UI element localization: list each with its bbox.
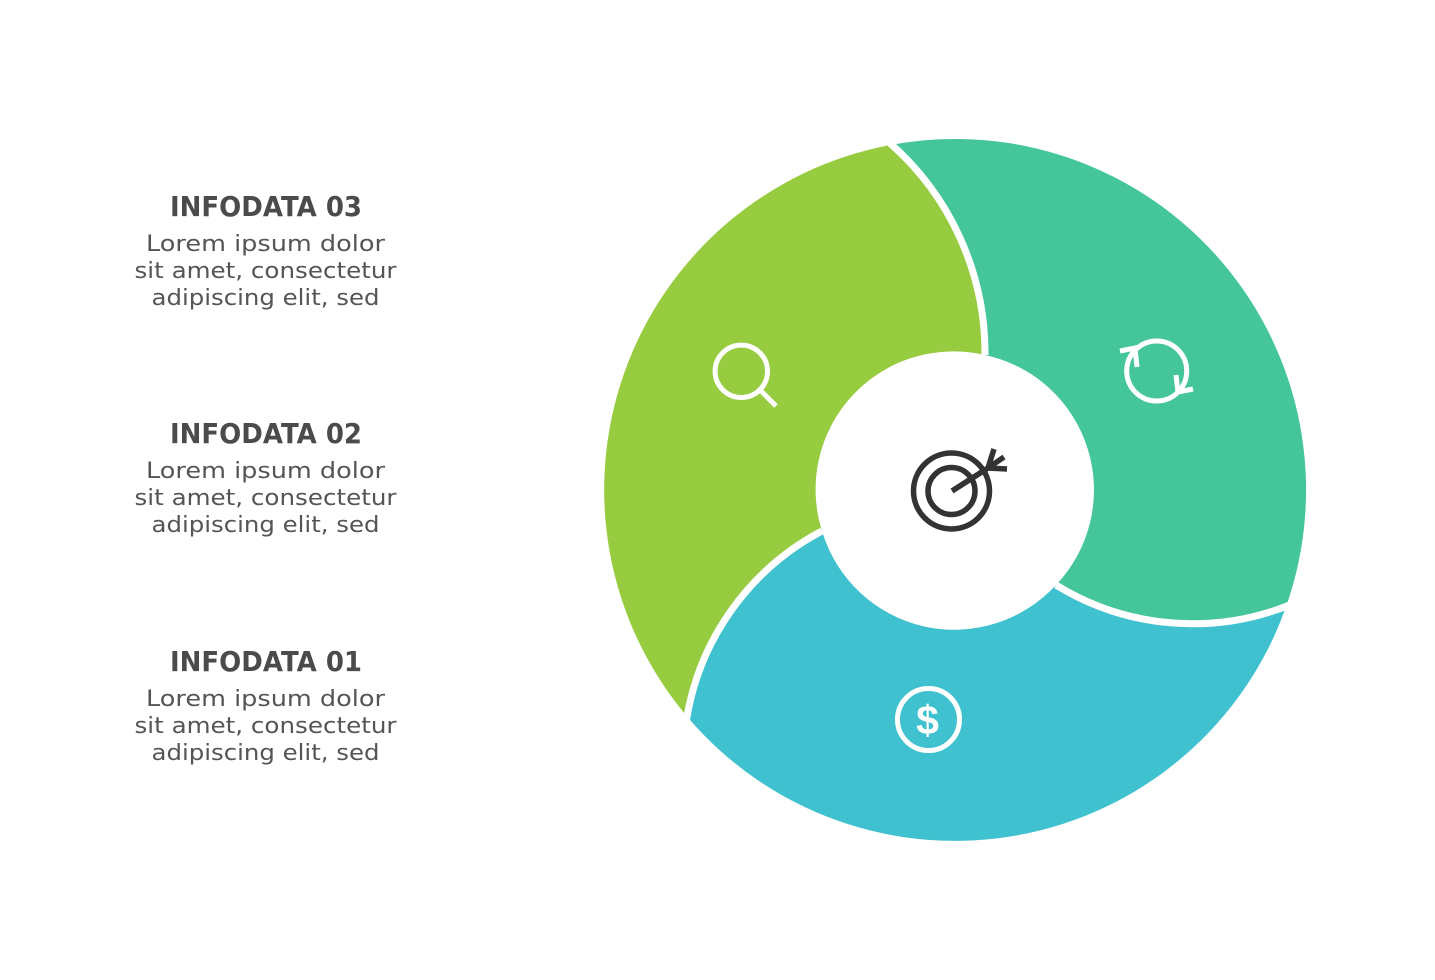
body text: infodata 03: sit amet, consectetur [134,258,397,284]
circular diagram [604,139,1306,841]
body text: infodata 02: adipiscing elit, sed [152,512,380,538]
body text: infodata 02: Lorem ipsum dolor [146,458,386,484]
center circle [817,352,1093,628]
icon: dollar coin [898,688,960,750]
text block: infodata 01 [134,645,397,766]
icon: refresh arrows [1120,341,1193,401]
divider: teal and blue [1056,585,1292,624]
body text: infodata 02 [134,458,397,538]
text block: infodata 02 [134,417,397,538]
segment: teal [891,139,1306,623]
icon: dollar coin: $ [916,697,939,743]
divider: green and teal [888,141,985,355]
body text: infodata 03 [134,231,397,311]
body text: infodata 01: Lorem ipsum dolor [146,686,386,712]
icon: magnifier [715,345,776,406]
heading: infodata 02: INFODATA 02 [170,417,362,450]
body text: infodata 01: sit amet, consectetur [134,713,397,739]
segment: blue [688,531,1286,841]
heading: infodata 03: INFODATA 03 [170,190,362,223]
segment: green [604,145,985,718]
body text: infodata 02: sit amet, consectetur [134,485,397,511]
icon: target with arrow [914,449,1007,529]
divider: blue and green [686,531,822,723]
body text: infodata 01: adipiscing elit, sed [152,740,380,766]
body text: infodata 01 [134,686,397,766]
text block: infodata 03 [134,190,397,311]
heading: infodata 01: INFODATA 01 [170,645,362,678]
body text: infodata 03: adipiscing elit, sed [152,285,380,311]
body text: infodata 03: Lorem ipsum dolor [146,231,386,257]
